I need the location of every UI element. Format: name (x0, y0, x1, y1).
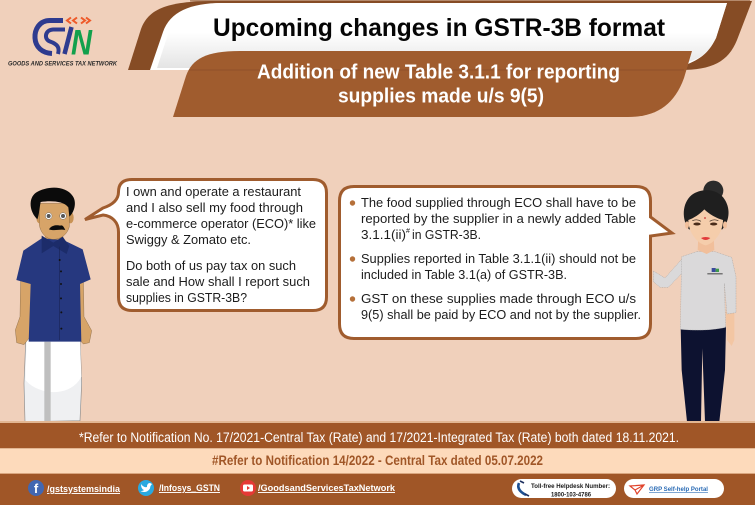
helpdesk pill: 1800-103-4786 (551, 492, 592, 498)
footnote band: notification 17/2021 (0, 421, 755, 449)
woman speech text: # (406, 228, 410, 235)
character: woman (653, 181, 736, 422)
man speech text: supplies in GSTR-3B? (126, 290, 247, 305)
subtitle banner (173, 51, 692, 117)
man speech text: and I also sell my food through (126, 200, 303, 215)
title text: Upcoming changes in GSTR-3B format (213, 14, 666, 42)
woman speech text: included in Table 3.1(a) of GSTR-3B. (361, 267, 567, 282)
character: man (15, 188, 92, 422)
header banner: title (128, 0, 752, 70)
woman speech text: 9(5) shall be paid by ECO and not by the supplier. (361, 307, 641, 322)
woman speech text: reported by the supplier in a newly added Table (361, 211, 636, 226)
facebook handle: /gstsystemsindia (47, 484, 121, 495)
subtitle text: Addition of new Table 3.1.1 for reporting (257, 62, 620, 84)
twitter handle: /Infosys_GSTN (159, 483, 220, 494)
woman speech text: Supplies reported in Table 3.1.1(ii) should not be (361, 251, 636, 266)
man speech text: e-commerce operator (ECO)* like (126, 216, 316, 231)
man speech text: I own and operate a restaurant (126, 184, 301, 199)
youtube handle: /GoodsandServicesTaxNetwork (258, 483, 396, 494)
footnote band: notification 14/2022: #Refer to Notification 14/2022 - Central Tax dated 05.07.2022 (212, 453, 543, 468)
footer bar (0, 473, 755, 505)
man speech text: Swiggy & Zomato etc. (126, 232, 251, 247)
woman speech text: 3.1.1(ii) (361, 227, 406, 242)
helpdesk pill (512, 479, 616, 498)
portal pill: GRP Self-help Portal (649, 487, 708, 493)
icon: facebook: f (34, 481, 39, 496)
portal pill (624, 479, 724, 498)
speech bubble: woman (340, 186, 672, 338)
icon: twitter (138, 480, 154, 496)
woman speech text: in GSTR-3B. (412, 227, 481, 242)
speech bubble: man (85, 180, 326, 310)
icon: facebook (28, 480, 44, 496)
icon: youtube (240, 480, 256, 496)
footnote band: notification 17/2021: *Refer to Notification No. 17/2021-Central Tax (Rate) and 17/2021-Integrated Tax (Rate) both dated 18.11.2021. (79, 430, 679, 445)
woman speech text: The food supplied through ECO shall have to be (361, 195, 636, 210)
helpdesk pill: Toll-free Helpdesk Number: (531, 484, 610, 490)
woman speech text: GST on these supplies made through ECO u/s (361, 291, 636, 306)
man speech text: sale and How shall I report such (126, 274, 310, 289)
logo: GSTN: GOODS AND SERVICES TAX NETWORK (8, 60, 117, 68)
logo: GSTN (8, 18, 117, 68)
subtitle text: supplies made u/s 9(5) (338, 86, 544, 108)
logo: GSTN: N (71, 24, 93, 62)
man speech text: Do both of us pay tax on such (126, 258, 296, 273)
bullet markers (350, 200, 355, 302)
footnote band: notification 14/2022 (0, 449, 755, 473)
